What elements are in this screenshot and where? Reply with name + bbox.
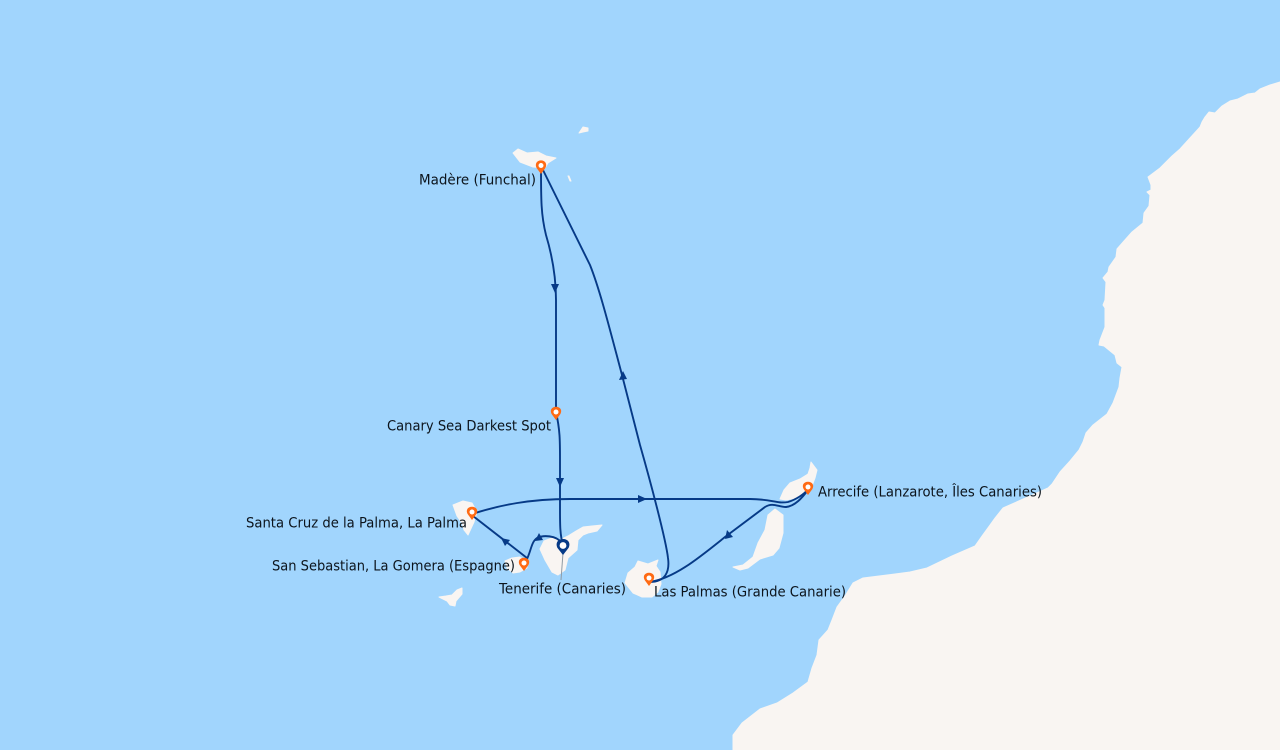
African coast landmass — [733, 82, 1280, 750]
island: Gran Canaria — [625, 560, 661, 597]
arrow: south of Canary Sea — [556, 478, 564, 487]
route: Tenerife to La Gomera — [526, 536, 562, 561]
label: Tenerife: Tenerife (Canaries) — [498, 582, 626, 598]
label: Las Palmas: Las Palmas (Grande Canarie) — [654, 584, 846, 600]
island: El Hierro — [439, 588, 462, 606]
island: Desertas — [568, 176, 571, 181]
route: Madeira to Canary Sea — [541, 166, 556, 412]
arrow: towards Las Palmas — [725, 530, 733, 539]
label: San Sebastian: San Sebastian, La Gomera (Espagne) — [272, 558, 515, 574]
arrow: towards La Gomera — [535, 533, 543, 541]
route: Canary Sea to Tenerife — [556, 412, 563, 545]
pin: San Sebastian — [519, 558, 529, 571]
pin: Santa Cruz de la Palma — [467, 507, 477, 520]
arrow: towards Arrecife — [638, 495, 647, 503]
arrow: towards La Palma — [501, 538, 510, 546]
island: Fuerteventura — [733, 509, 783, 570]
island: Tenerife — [540, 525, 602, 575]
route: Las Palmas to Madeira — [541, 166, 668, 582]
arrow: south of Madeira — [551, 284, 559, 293]
island: La Gomera — [505, 557, 527, 573]
arrow: towards Madeira — [619, 371, 627, 380]
route: La Palma to Arrecife — [472, 489, 808, 514]
label: Canary Sea Darkest Spot: Canary Sea Darkest Spot — [387, 418, 551, 434]
label: Santa Cruz de la Palma: Santa Cruz de la Palma, La Palma — [246, 516, 467, 532]
pin: Las Palmas — [644, 573, 654, 586]
route: La Gomera to La Palma — [473, 516, 527, 558]
island: La Palma — [453, 501, 477, 535]
island: Madeira — [513, 149, 556, 168]
island: Porto Santo — [579, 127, 588, 133]
route lines — [472, 166, 808, 582]
route: Arrecife to Las Palmas — [650, 490, 808, 582]
island: Lanzarote — [780, 462, 817, 500]
pin: Madère — [536, 160, 546, 174]
pin: Tenerife departure port — [557, 539, 569, 555]
pin: Canary Sea Darkest Spot — [551, 407, 561, 420]
label: Arrecife: Arrecife (Lanzarote, Îles Canaries) — [818, 482, 1042, 500]
label: Madère: Madère (Funchal) — [419, 172, 536, 188]
pin: Arrecife — [803, 482, 813, 495]
leader line: Tenerife — [561, 553, 563, 580]
direction arrows — [501, 284, 733, 546]
